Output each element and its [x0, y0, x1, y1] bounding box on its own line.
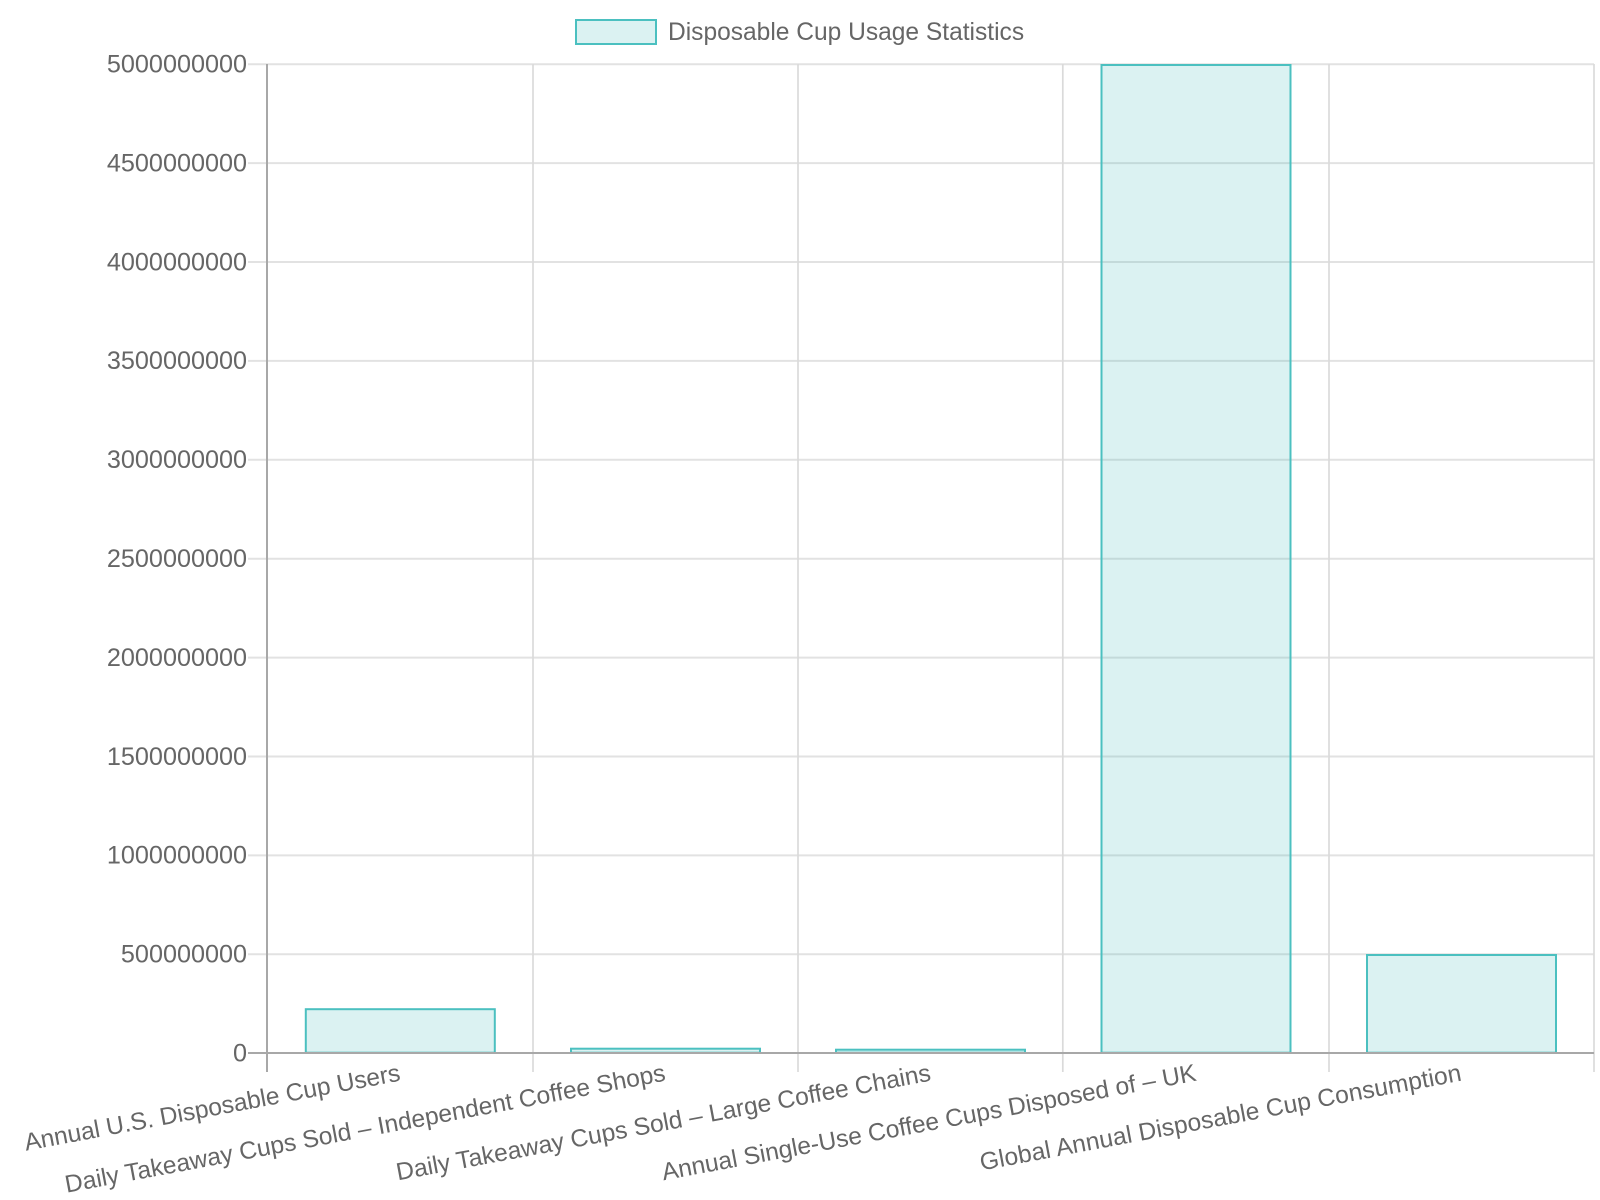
- x axis labels: Global Annual Disposable Cup Consumption: [978, 1060, 1464, 1176]
- x axis labels: [22, 1060, 1464, 1199]
- bar: Annual U.S. Disposable Cup Users: [306, 1009, 495, 1053]
- y axis labels: 3000000000: [107, 446, 247, 474]
- x axis labels: Daily Takeaway Cups Sold – Large Coffee Chains: [394, 1060, 933, 1186]
- x axis labels: Annual U.S. Disposable Cup Users: [22, 1060, 402, 1157]
- y axis labels: 1500000000: [107, 743, 247, 771]
- y axis labels: 5000000000: [107, 50, 247, 78]
- y axis labels: 2500000000: [107, 545, 247, 573]
- y axis labels: 3500000000: [107, 347, 247, 375]
- x axis labels: Daily Takeaway Cups Sold – Independent Coffee Shops: [63, 1060, 668, 1199]
- bar: Annual Single-Use Coffee Cups Disposed of – UK: [1102, 65, 1290, 1053]
- legend swatch: [576, 20, 656, 44]
- bar: Daily Takeaway Cups Sold – Independent Coffee Shops: [571, 1049, 760, 1053]
- y axis labels: 500000000: [121, 941, 247, 969]
- y axis labels: 1000000000: [107, 842, 247, 870]
- bar chart: [306, 65, 1556, 1053]
- bar: Daily Takeaway Cups Sold – Large Coffee Chains: [836, 1050, 1025, 1053]
- y axis labels: 2000000000: [107, 644, 247, 672]
- axes: [248, 64, 1594, 1072]
- y axis labels: 4000000000: [107, 248, 247, 276]
- bar: Global Annual Disposable Cup Consumption: [1367, 955, 1556, 1053]
- legend: [576, 19, 1024, 46]
- y axis labels: 4500000000: [107, 149, 247, 177]
- x axis labels: Annual Single-Use Coffee Cups Disposed of – UK: [660, 1060, 1199, 1186]
- legend label: Disposable Cup Usage Statistics: [668, 19, 1024, 46]
- y axis labels: 0: [233, 1040, 247, 1068]
- y axis labels: [107, 50, 247, 1068]
